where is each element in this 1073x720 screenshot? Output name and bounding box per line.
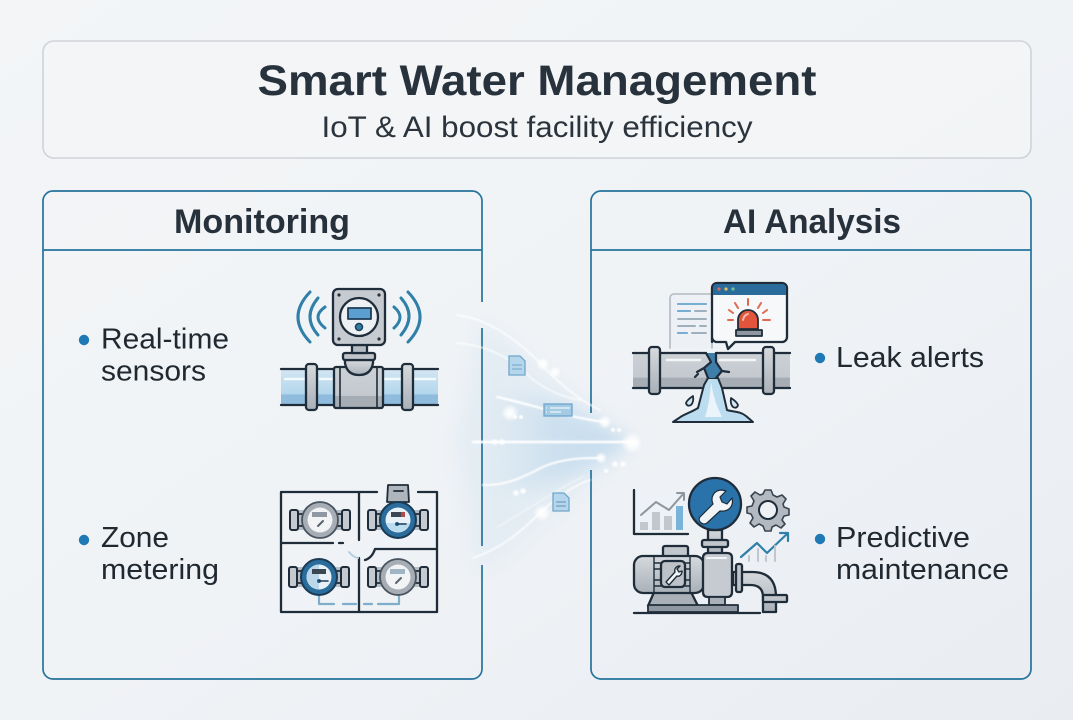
icon: document top <box>509 356 525 375</box>
panel: monitoring <box>43 191 482 679</box>
icon: data card <box>544 404 572 416</box>
data flow stream <box>457 315 643 558</box>
subtitle: IoT & AI boost facility efficiency <box>322 111 752 144</box>
title: Smart Water Management <box>258 57 816 105</box>
bullet: predictive maintenance: maintenance <box>836 554 1009 586</box>
bullet: zone metering: Zone <box>101 522 169 554</box>
heading: ai analysis: AI Analysis <box>723 203 901 241</box>
icon: pipe sensor <box>281 289 438 410</box>
bullet: predictive maintenance: Predictive <box>836 522 970 554</box>
panel: ai analysis <box>591 191 1031 679</box>
meter: top left <box>290 502 350 538</box>
meter: bottom right <box>368 559 428 595</box>
flow lines <box>457 315 637 558</box>
panel: title banner <box>43 41 1031 158</box>
data flow glow <box>455 318 632 575</box>
meter: top right <box>368 502 428 538</box>
bullet: zone metering <box>79 522 219 586</box>
bullet: real-time sensors: Real-time <box>101 324 229 356</box>
bullet: predictive maintenance <box>815 522 1009 586</box>
icon: leak alert <box>633 283 790 422</box>
icon: zone meters <box>281 485 437 612</box>
bullet: zone metering: metering <box>101 554 219 586</box>
bullet: real-time sensors: sensors <box>101 356 206 388</box>
sparks <box>491 357 643 522</box>
heading: monitoring: Monitoring <box>174 203 350 241</box>
icon: predictive maintenance <box>634 478 789 613</box>
meter: bottom left <box>289 559 349 595</box>
bullet: leak alerts: Leak alerts <box>836 342 984 374</box>
icon: document bottom <box>553 493 569 511</box>
bullet: real-time sensors <box>79 324 229 388</box>
